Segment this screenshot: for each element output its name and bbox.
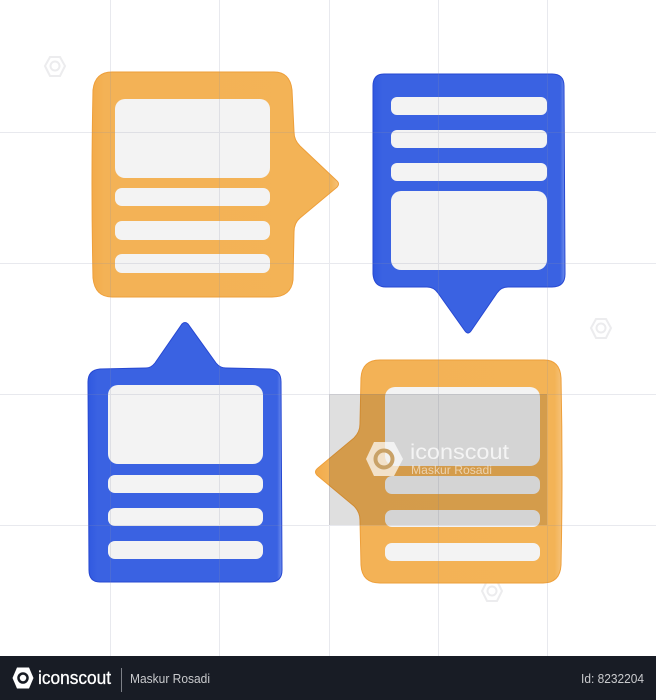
- text line 1: [391, 97, 547, 115]
- footer bar: [0, 656, 656, 700]
- text line 1: [115, 188, 270, 206]
- brand name: iconscout: [38, 668, 111, 688]
- image block: [385, 387, 540, 466]
- panel: orange bubble top left pointing right: [92, 72, 338, 297]
- panel: blue bubble top right pointing down: [373, 74, 565, 333]
- icon: iconscout logo: [12, 668, 34, 688]
- text line 3: [108, 541, 263, 559]
- watermark author: Maskur Rosadi: [411, 463, 492, 477]
- author name: Maskur Rosadi: [130, 671, 210, 686]
- panel: orange bubble bottom right pointing left: [316, 360, 562, 583]
- divider: [121, 668, 122, 692]
- text line 2: [108, 508, 263, 526]
- image block: [108, 385, 263, 464]
- text line 1: [108, 475, 263, 493]
- text line 2: [115, 221, 270, 240]
- panel: blue bubble bottom left pointing up: [88, 322, 282, 582]
- text line 3: [391, 163, 547, 181]
- icon: watermark logo: [366, 442, 403, 476]
- icon: small watermark top left: [45, 57, 65, 76]
- icon: small watermark right: [591, 319, 611, 338]
- asset id: Id: 8232204: [581, 671, 644, 686]
- icon: small watermark bottom: [482, 581, 502, 601]
- text line 3: [115, 254, 270, 273]
- image block: [115, 99, 270, 178]
- watermark overlay: [329, 394, 547, 525]
- watermark brand name: iconscout: [410, 441, 509, 464]
- text line 3: [385, 543, 540, 561]
- text line 2: [385, 510, 540, 527]
- text line 1: [385, 476, 540, 494]
- image block: [391, 191, 547, 270]
- text line 2: [391, 130, 547, 148]
